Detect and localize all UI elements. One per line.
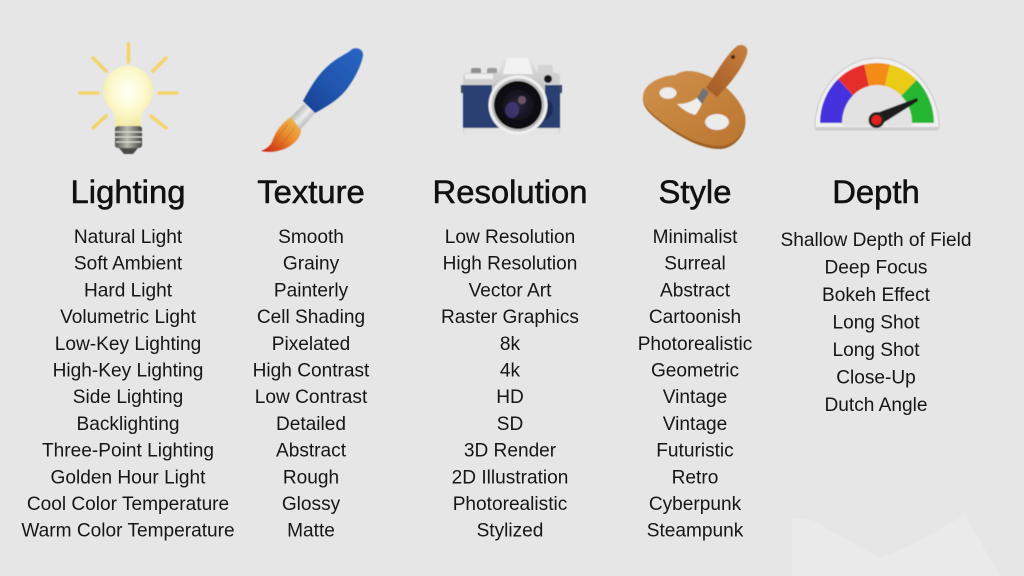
list: Resolution: Raster Graphics (441, 307, 579, 328)
icon: paint brush (261, 48, 363, 152)
heading: Depth: Depth (832, 173, 920, 210)
list: Lighting: Golden Hour Light (51, 467, 206, 488)
list: Depth: Long Shot (832, 312, 920, 334)
list: Resolution: Photorealistic (453, 494, 568, 515)
list: Resolution: SD (497, 414, 523, 435)
list: Texture: Detailed (276, 414, 346, 435)
list: Lighting: Volumetric Light (60, 307, 197, 328)
list: Resolution (441, 227, 579, 542)
list: Texture: Glossy (282, 494, 341, 515)
list: Style: Vintage (663, 414, 727, 435)
list: Texture: High Contrast (253, 360, 370, 382)
icon: palette (643, 45, 747, 149)
list: Resolution: High Resolution (443, 254, 577, 275)
list: Style: Retro (672, 467, 718, 488)
list: Resolution: HD (496, 387, 524, 408)
heading: Texture: Texture (257, 173, 365, 210)
list: Texture: Rough (283, 467, 339, 488)
list: Resolution: 8k (500, 334, 521, 355)
list: Lighting: Side Lighting (73, 387, 183, 408)
list: Depth (780, 230, 972, 416)
list: Lighting: Cool Color Temperature (27, 494, 229, 515)
list: Lighting: Natural Light (74, 227, 183, 248)
list: Style: Cartoonish (649, 307, 741, 328)
list: Lighting: High-Key Lighting (53, 360, 203, 382)
icon: depth gauge (815, 58, 939, 130)
list: Resolution: Vector Art (469, 280, 552, 301)
list: Style: Photorealistic (638, 334, 753, 355)
icon: light bulb (80, 44, 177, 154)
list: Texture: Matte (287, 521, 335, 542)
list: Lighting: Hard Light (84, 280, 173, 301)
heading: Style: Style (659, 173, 731, 210)
list: Texture: Low Contrast (255, 387, 368, 408)
icon: camera (461, 58, 562, 135)
list: Resolution: Low Resolution (445, 227, 575, 248)
list: Resolution: 4k (500, 360, 521, 382)
list: Texture: Abstract (276, 441, 347, 462)
list: Lighting: Soft Ambient (74, 254, 183, 275)
list: Style (638, 227, 753, 542)
list: Resolution: 2D Illustration (452, 467, 568, 488)
heading: Lighting: Lighting (71, 173, 185, 210)
list: Texture (253, 227, 370, 542)
list: Depth: Long Shot (832, 340, 920, 361)
list: Texture: Painterly (274, 280, 349, 301)
list: Lighting: Warm Color Temperature (21, 521, 235, 542)
list: Style: Abstract (660, 280, 731, 301)
list: Depth: Deep Focus (825, 258, 927, 278)
list: Style: Surreal (664, 254, 726, 275)
list: Texture: Smooth (278, 227, 344, 248)
list: Resolution: Stylized (477, 521, 543, 542)
list: Depth: Shallow Depth of Field (780, 230, 972, 251)
list: Style: Steampunk (647, 521, 744, 542)
list: Style: Geometric (651, 360, 739, 382)
list: Style: Futuristic (656, 441, 734, 462)
list: Style: Minimalist (653, 227, 738, 248)
list: Style: Cyberpunk (649, 494, 742, 515)
list: Depth: Bokeh Effect (822, 285, 931, 306)
list: Lighting (21, 227, 235, 542)
list: Resolution: 3D Render (464, 441, 557, 462)
list: Texture: Grainy (283, 254, 340, 275)
list: Texture: Cell Shading (257, 307, 365, 328)
list: Lighting: Backlighting (77, 414, 179, 435)
list: Style: Vintage (663, 387, 727, 408)
list: Texture: Pixelated (272, 334, 350, 355)
list: Lighting: Low-Key Lighting (55, 334, 201, 355)
heading: Resolution: Resolution (433, 173, 587, 210)
list: Depth: Close-Up (836, 368, 916, 388)
list: Depth: Dutch Angle (825, 395, 927, 416)
list: Lighting: Three-Point Lighting (42, 441, 214, 462)
